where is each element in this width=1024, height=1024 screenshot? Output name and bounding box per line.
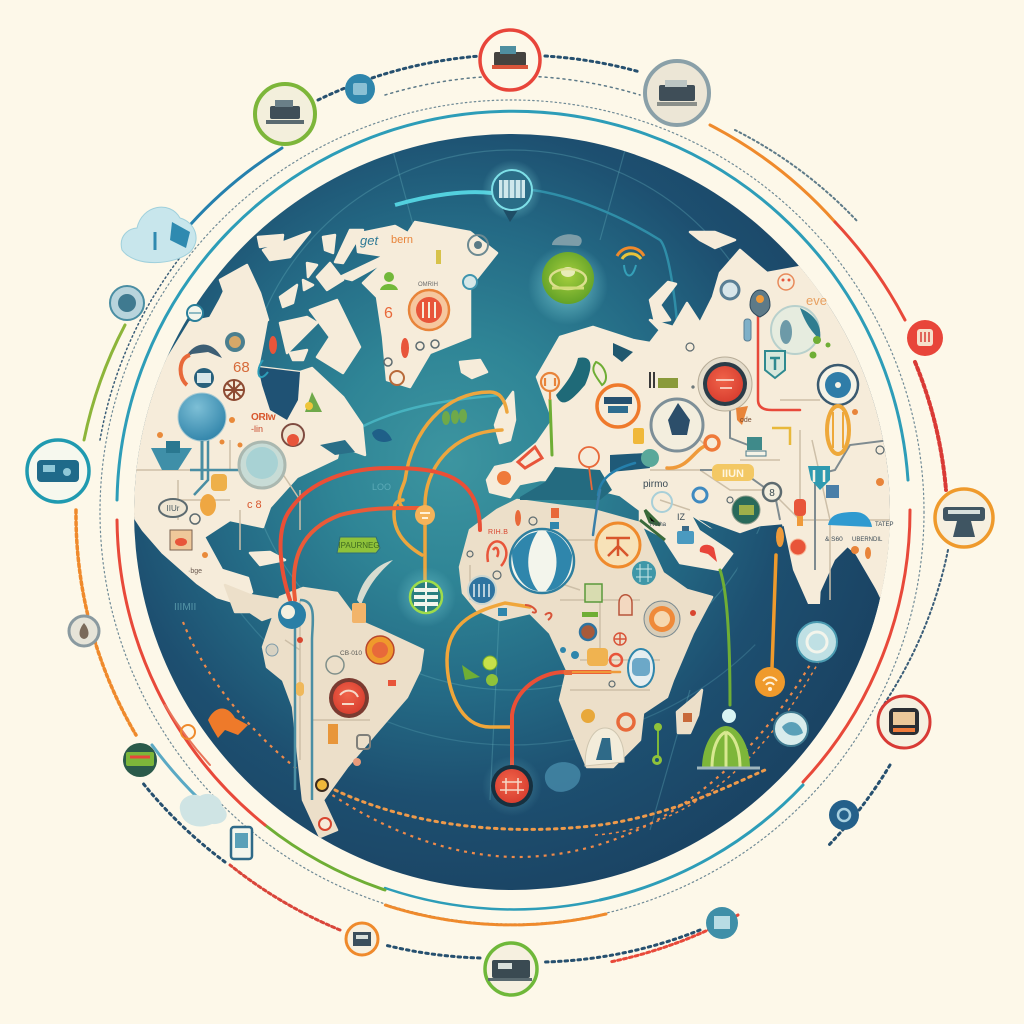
icon: arch box	[619, 595, 632, 615]
icon: network node green	[396, 567, 456, 627]
icon: circle marker orange	[705, 436, 719, 450]
Africa icons	[467, 508, 696, 766]
map labels	[188, 359, 276, 575]
icon: number ring	[763, 483, 781, 501]
icon: ocean cloud	[545, 762, 580, 792]
icon: orange balloon	[497, 471, 511, 485]
icon: yellow bell	[211, 474, 227, 491]
Caribbean	[250, 552, 285, 565]
icon: pale lens	[652, 492, 672, 512]
icon: blue train	[628, 649, 654, 687]
label: RIH.B	[488, 529, 508, 536]
icon: green dome	[697, 709, 760, 768]
red route short	[294, 508, 425, 600]
icon: top right grey ring	[645, 61, 709, 125]
Madagascar mark	[683, 713, 692, 722]
grey coil	[357, 735, 370, 749]
icon: number ring: 8	[769, 488, 775, 499]
South America	[263, 588, 423, 837]
icon: red paddle	[794, 499, 806, 526]
Britain	[495, 392, 515, 443]
icon: yellow pill label: IIUN	[722, 468, 744, 480]
icon: orange sun	[366, 636, 394, 664]
icon: red globe	[329, 678, 369, 718]
icon: green badge	[528, 245, 608, 325]
ocean grid lines and dotted routes	[170, 150, 819, 858]
icon: red dot	[790, 539, 806, 555]
icon: top ring	[468, 235, 488, 255]
icon: green swirl	[593, 362, 606, 385]
icon: orange oval	[776, 527, 784, 547]
icon: dark green badge	[732, 496, 760, 524]
map labels: ·bge	[188, 568, 202, 575]
icon: pin drop	[750, 290, 770, 317]
icon: yellow figure	[581, 709, 595, 723]
Black Sea and Caspian	[610, 453, 650, 472]
icon: dark gold node	[316, 779, 328, 791]
icon: map lens	[651, 399, 703, 451]
icon: blue disc	[797, 622, 837, 662]
Eurasia icons	[497, 274, 893, 562]
icon: orange chevrons	[518, 447, 542, 468]
map labels: & S60	[825, 536, 843, 543]
icon: red pin dial	[282, 424, 304, 446]
icon: teal node	[641, 449, 659, 467]
map labels: TATEP	[875, 522, 893, 528]
map labels: c 8	[247, 499, 262, 511]
icon: cloud and wifi top	[552, 234, 644, 276]
icon: red crosshair	[614, 633, 626, 645]
dots	[157, 417, 242, 558]
red route to bottom node	[512, 672, 610, 765]
icon: badge	[194, 368, 214, 388]
icon: cloud top left	[121, 207, 196, 263]
icon: blue grille	[468, 576, 496, 604]
icon: top small blue	[345, 74, 375, 104]
icon: red bottom node	[482, 756, 542, 816]
icon: left small grey	[69, 616, 99, 646]
map labels: OMRIH	[418, 282, 438, 288]
icon: lower right red ring	[878, 696, 930, 748]
callout: green tag	[337, 537, 380, 553]
ring marker	[266, 644, 278, 656]
map labels: 6	[384, 305, 393, 322]
icon: ellipse badge: IIUr	[167, 504, 180, 513]
map labels: bern	[391, 234, 413, 246]
map labels: -lin	[251, 424, 263, 434]
icon: blue shield	[765, 351, 785, 378]
blue strait	[598, 463, 635, 495]
India and Indochina	[783, 520, 893, 604]
icon: globe top pin	[482, 160, 542, 222]
Spain	[487, 462, 526, 497]
icon: ring top	[721, 281, 739, 299]
icon: lower left tablet	[231, 827, 252, 859]
icon: bottom left orange ring	[346, 923, 378, 955]
icon: green grass	[640, 510, 665, 540]
Madagascar	[677, 690, 702, 733]
icon: orange emblem	[596, 523, 640, 567]
callout: green tag: IPAURNEG	[338, 541, 380, 550]
icon: orange ball	[618, 714, 634, 730]
blue wave	[258, 360, 268, 377]
map labels: ode	[740, 417, 752, 424]
outer rings and connector arcs	[76, 56, 948, 962]
icon: red loop	[487, 541, 506, 566]
small markers	[515, 508, 696, 675]
icon: blue dial	[818, 365, 858, 405]
map labels: 68	[233, 359, 250, 376]
icon: orange glyph head	[778, 274, 794, 290]
White Sea	[613, 343, 633, 362]
icon: red swoosh	[525, 605, 551, 620]
icon: right red dot	[907, 320, 943, 356]
yellow mark	[296, 682, 304, 696]
Greenland	[363, 222, 497, 387]
red mark	[388, 680, 396, 686]
icon: blue droplet	[693, 488, 707, 502]
icon: small lens	[187, 305, 203, 321]
orange vertical	[772, 555, 776, 668]
icon: yellow tile	[633, 428, 644, 444]
icon: lens	[463, 275, 477, 289]
icon: capsule	[744, 319, 751, 341]
icon: left teal ring	[27, 440, 89, 502]
icon: orange maple	[541, 373, 559, 400]
icon: green person	[380, 272, 398, 290]
icon: red button	[698, 357, 752, 411]
icon: lower right navy	[829, 800, 859, 830]
icon: bottom green ring	[485, 943, 537, 995]
icon: right orange ring	[935, 489, 993, 547]
dots	[810, 336, 830, 358]
map labels: ORIw	[251, 412, 276, 423]
Baltic	[556, 357, 590, 402]
map labels: pirmo	[643, 479, 668, 490]
icon: green cup	[305, 392, 322, 412]
icon: left dark green stack	[650, 372, 678, 388]
icon: ocean fish mark	[372, 429, 392, 442]
icon: blue device	[677, 526, 694, 544]
label: CB·010	[340, 650, 362, 657]
icon: ring node	[225, 332, 245, 352]
icon: bottom right teal	[706, 907, 738, 939]
icon: red figure	[269, 336, 277, 354]
icon: wheel	[224, 380, 244, 400]
Eurasia	[510, 250, 893, 603]
icon: orange barrel	[587, 648, 608, 666]
map labels: UBERNDIL	[852, 537, 883, 543]
blue node at top	[278, 601, 306, 629]
map labels	[360, 233, 438, 322]
icon: large blue dome	[178, 393, 226, 480]
Greenland icons	[360, 233, 488, 385]
Arctic islands	[220, 226, 420, 373]
land circuit traces	[136, 399, 890, 760]
icon: monitor	[746, 437, 766, 456]
icon: teal shield	[808, 466, 830, 490]
icon: glass globe	[774, 712, 808, 746]
icon: orange face	[200, 494, 216, 516]
icon: glass lens	[239, 442, 285, 488]
Gulf inlet	[320, 440, 355, 455]
North America icons	[151, 305, 322, 575]
ring markers	[384, 340, 439, 366]
orange loop to Africa	[447, 603, 530, 727]
icon: red lock	[610, 654, 622, 666]
map labels: get	[360, 233, 379, 248]
icon: lower left cloud	[180, 794, 227, 826]
Mediterranean	[520, 467, 612, 500]
icon: swirl	[580, 624, 596, 640]
connection lines	[281, 315, 800, 765]
globe	[134, 134, 894, 890]
icon: ticket	[170, 530, 192, 550]
icon: swirl	[390, 371, 404, 385]
icon: blue tile	[826, 485, 839, 498]
land redraw of peninsulas	[783, 520, 893, 604]
Central America	[225, 585, 285, 620]
icon: orange ring monitor	[597, 385, 639, 427]
icon: ghost sphere	[771, 306, 820, 354]
icon: red drop	[401, 338, 409, 358]
seas cut into land	[258, 343, 885, 650]
icon: ellipse badge	[159, 499, 187, 517]
icon: junction orange	[415, 505, 435, 525]
map labels	[643, 293, 893, 543]
icon: teapot device	[151, 441, 192, 470]
icon: orange hook	[181, 355, 190, 385]
orange/blue card	[328, 724, 338, 744]
small green stem	[657, 728, 659, 758]
icon: yellow totem	[827, 406, 849, 454]
label: ocean ghost: LOO	[372, 482, 391, 492]
continents	[125, 222, 893, 837]
icon: small green pin	[652, 723, 662, 765]
icon: wifi node	[755, 667, 785, 697]
icon: chess piece dome	[585, 728, 624, 766]
icon: top red ring	[480, 30, 540, 90]
icon: teal grid	[632, 561, 656, 585]
icon: red lollipop	[579, 447, 599, 490]
Iceland	[460, 360, 487, 378]
red Asia line	[758, 315, 800, 410]
Indian Ocean north	[693, 517, 885, 650]
Africa	[460, 500, 712, 767]
icon: orange blob south-west	[208, 708, 248, 738]
icon: dome hat	[185, 344, 222, 358]
ocean disc	[134, 134, 890, 890]
icon: red target	[319, 818, 331, 830]
icon: white tusk	[357, 560, 393, 605]
icon: yellow bracket	[772, 428, 790, 445]
icon: striped globe	[510, 529, 574, 593]
Kamchatka side islands	[650, 232, 735, 322]
Hudson Bay	[258, 367, 300, 420]
South America icons	[266, 601, 396, 830]
ring marker	[190, 514, 200, 524]
icon: orange ring badge	[409, 290, 449, 330]
icon: top left green ring	[255, 84, 315, 144]
icon: left upper small	[110, 286, 144, 320]
icon: red tag	[700, 545, 717, 562]
orange Asia curve	[667, 445, 710, 468]
icon: yellow pill label	[712, 464, 754, 481]
icon: orange tag	[736, 406, 748, 425]
map labels: Rotha	[650, 522, 667, 528]
icon: orange gauge	[644, 601, 680, 637]
icon: yellow tag	[436, 250, 441, 264]
icon: green leaves	[442, 409, 467, 425]
map labels: eve	[806, 293, 827, 308]
orange route to Greenland side	[399, 392, 507, 508]
icon: blue bus	[828, 512, 872, 527]
green vertical lines	[550, 400, 552, 455]
North America	[125, 285, 365, 604]
red route long	[281, 468, 480, 600]
label: ocean ghost text: IIIMII	[174, 602, 196, 613]
icon: green dots	[462, 656, 498, 686]
icon: left lower green device	[123, 743, 157, 777]
map labels: IZ	[677, 512, 686, 522]
icon: orange lock	[352, 603, 366, 623]
icon: green box	[585, 584, 602, 602]
